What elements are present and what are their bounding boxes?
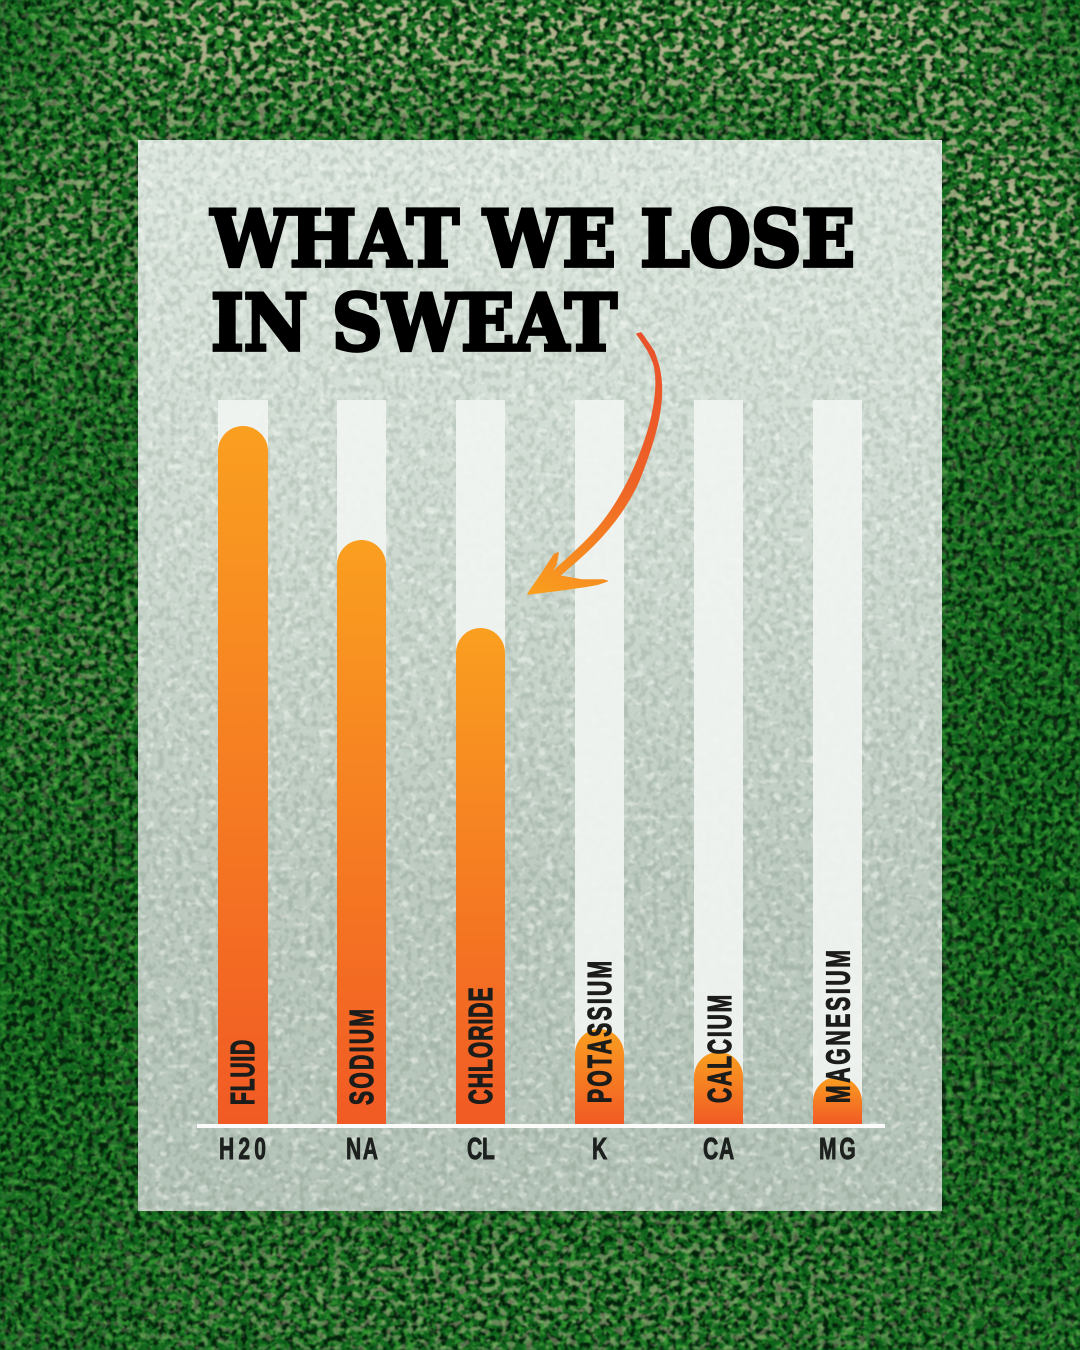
bar: fluid <box>218 400 268 1124</box>
axis label: CA: CA <box>703 1131 734 1166</box>
bar: chloride <box>456 400 505 1124</box>
axis label: CL: CL <box>467 1131 495 1166</box>
bar chart <box>197 400 885 1166</box>
axis label: K: K <box>592 1131 607 1166</box>
axis label: H20: H20 <box>219 1131 266 1166</box>
bar label: potassium: POTASSIUM <box>581 961 618 1103</box>
bar label: sodium: SODIUM <box>343 1009 380 1105</box>
axis label: MG: MG <box>819 1131 856 1166</box>
title: IN SWEAT <box>211 278 617 369</box>
bar: magnesium <box>813 400 862 1124</box>
panel: translucent chart card <box>138 140 942 1211</box>
title <box>210 194 855 369</box>
axis label: NA: NA <box>346 1131 378 1166</box>
arrow: hand-drawn pointer to chart <box>528 333 661 594</box>
bar label: calcium: CALCIUM <box>701 995 738 1103</box>
bar: sodium <box>337 400 386 1124</box>
bar: potassium <box>575 400 624 1124</box>
axis line <box>197 1124 885 1128</box>
bar label: fluid: FLUID <box>224 1040 261 1105</box>
title: WHAT WE LOSE <box>210 194 855 285</box>
bar label: chloride: CHLORIDE <box>462 987 499 1104</box>
bar: calcium <box>694 400 743 1124</box>
bar label: magnesium: MAGNESIUM <box>820 950 857 1103</box>
